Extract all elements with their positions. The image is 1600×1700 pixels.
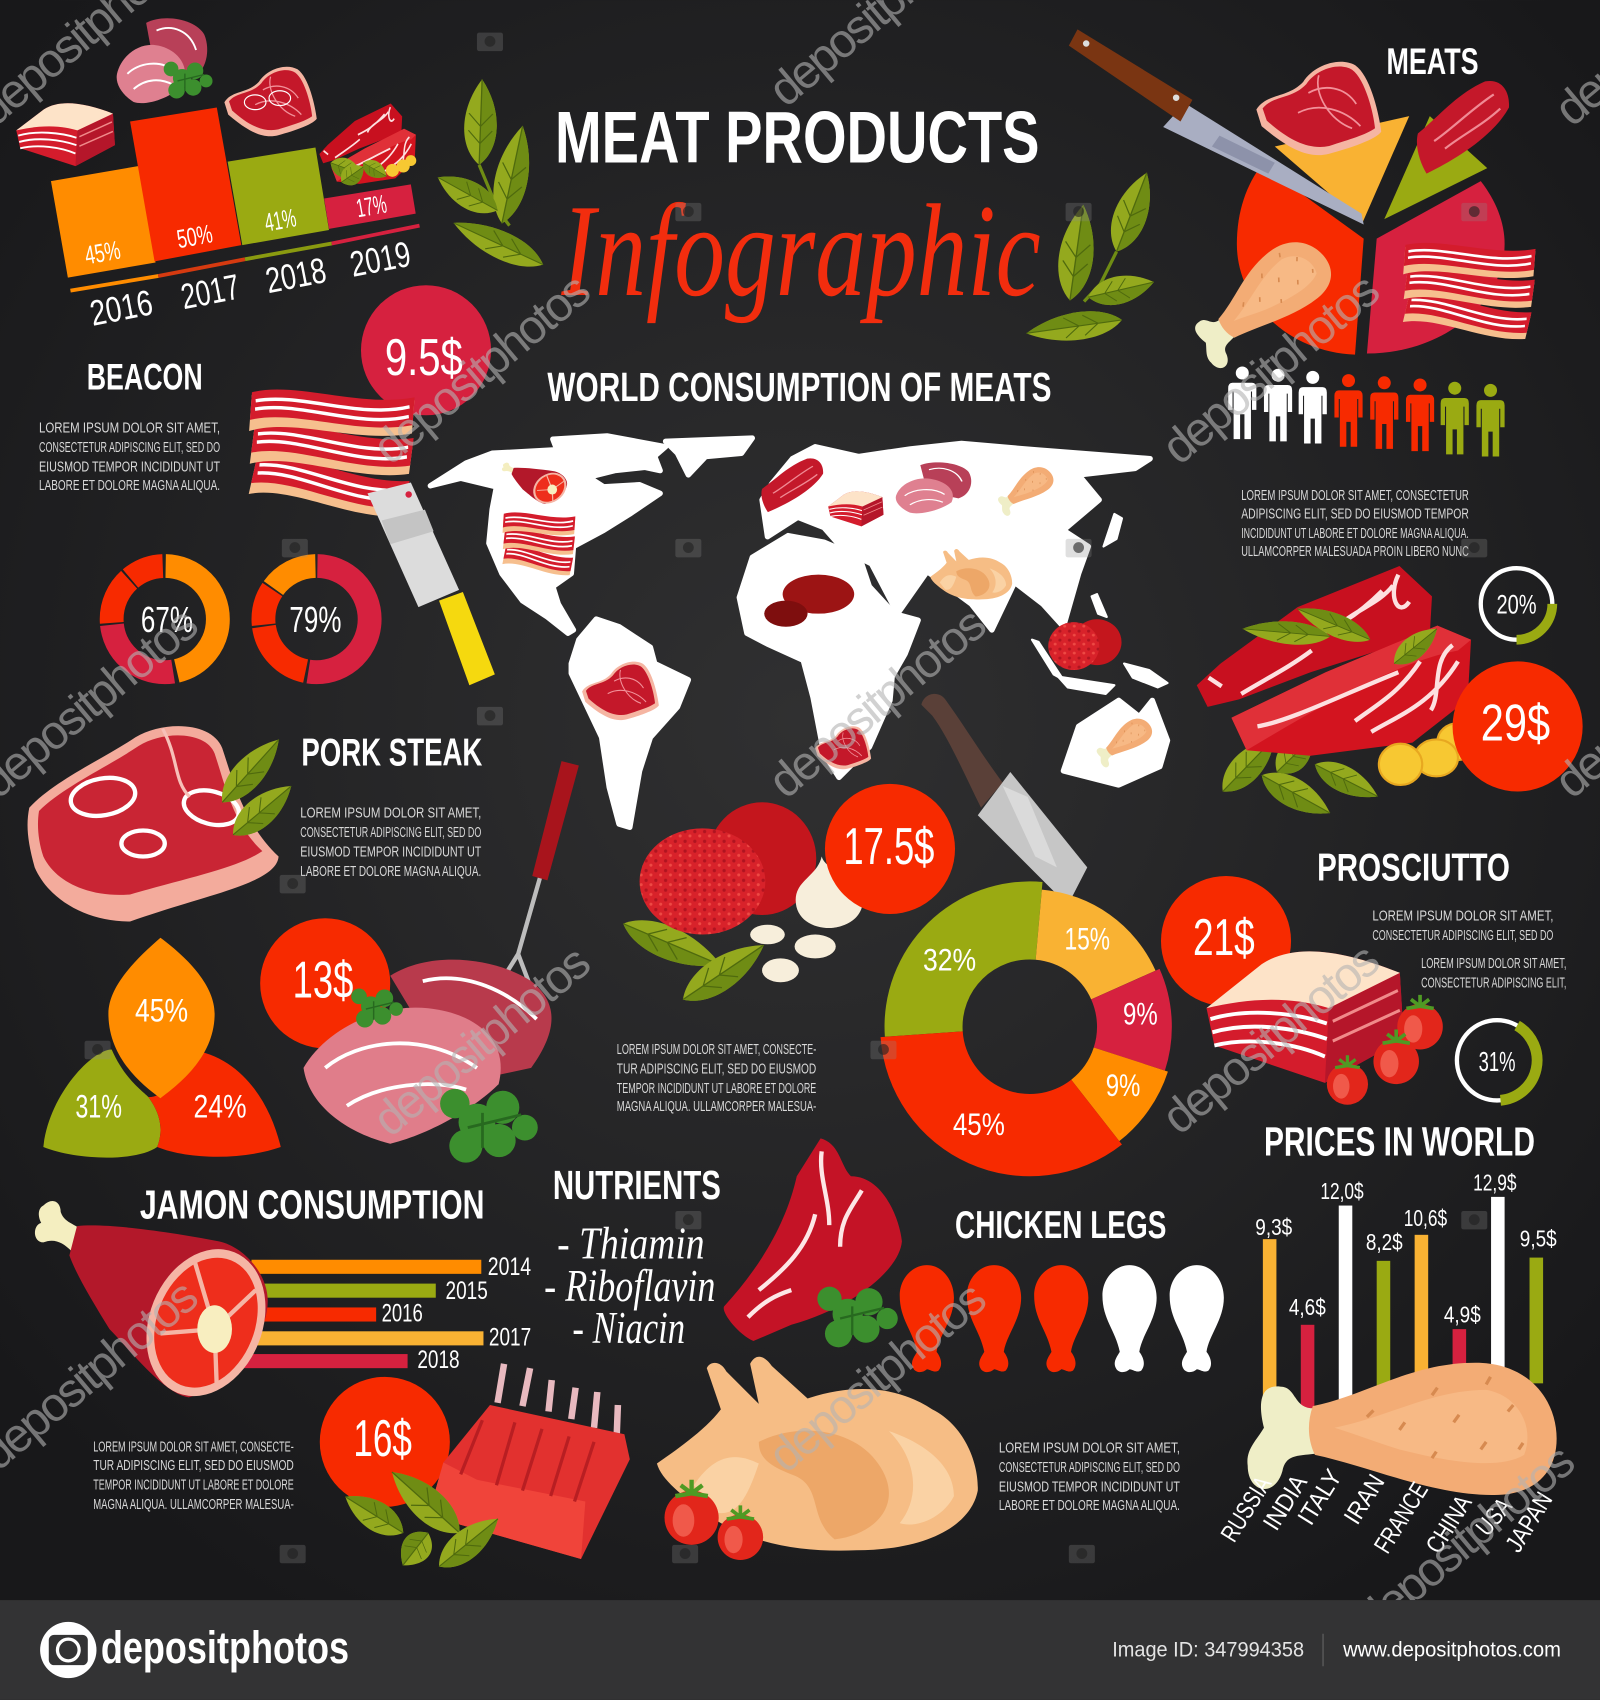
text: jamon: MAGNA ALIQUA. ULLAMCORPER MALESUA- (93, 1496, 294, 1513)
country labels: USA (1471, 1492, 1518, 1541)
price badge 17.5$: 17.5$ (843, 818, 934, 876)
chart: main donut: 45% (953, 1107, 1005, 1142)
price badge 9.5$: 9.5$ (385, 329, 463, 387)
title (555, 96, 1041, 324)
map: pork (896, 462, 971, 513)
icon: steak (1256, 62, 1381, 155)
world map (430, 436, 1167, 827)
icon: bacon strips (249, 387, 415, 524)
site url: www.depositphotos.com (1342, 1637, 1561, 1662)
bar 2016: 2016 (87, 283, 156, 334)
text: chicken legs (999, 1440, 1180, 1514)
text: pork steak: LOREM IPSUM DOLOR SIT AMET, (300, 804, 481, 821)
chart: main donut: 32% (923, 942, 976, 977)
icon: steak nutrients (724, 1138, 902, 1341)
country labels (1216, 1464, 1558, 1558)
leaves on beef (1242, 598, 1444, 672)
ring 20% (1481, 568, 1552, 640)
text: beacon: EIUSMOD TEMPOR INCIDIDUNT UT (39, 459, 220, 476)
price badge 21$ (1161, 876, 1291, 1006)
donut 67% (112, 566, 218, 672)
text: beacon: LABORE ET DOLORE MAGNA ALIQUA. (39, 477, 220, 494)
price badge 17.5$ (825, 784, 955, 914)
icon: cleaver yellow (367, 483, 495, 685)
text: chicken legs: CONSECTETUR ADIPISCING ELIT, SED DO (999, 1459, 1180, 1476)
icon: drumstick (1179, 227, 1342, 374)
chart: jamon bars (244, 1253, 531, 1374)
watermarks: depositphotos (759, 1272, 996, 1483)
chart: jamon bars: 2016 (382, 1300, 423, 1328)
price badge 16$: 16$ (353, 1410, 412, 1468)
heading: meats: MEATS (1386, 41, 1479, 82)
text: center: TUR ADIPISCING ELIT, SED DO EIUSMOD (617, 1060, 816, 1077)
list: nutrients: - Riboflavin (544, 1260, 715, 1311)
text: chicken legs: EIUSMOD TEMPOR INCIDIDUNT UT (999, 1479, 1180, 1496)
icon: steak with onion (224, 67, 317, 136)
text: center (617, 1041, 816, 1115)
icon: ham (35, 1201, 287, 1414)
chicken leg silhouettes (900, 1265, 1224, 1372)
watermark camera icons (85, 33, 1487, 1563)
heading: nutrients: NUTRIENTS (553, 1162, 721, 1208)
chart: jamon bars: 2015 (446, 1277, 488, 1305)
text: center: MAGNA ALIQUA. ULLAMCORPER MALESUA- (617, 1098, 816, 1115)
logo (40, 1622, 349, 1678)
icon: rack of lamb (428, 1364, 630, 1559)
country labels: ITALY (1292, 1464, 1348, 1530)
leaves under patties (617, 909, 773, 1013)
map: south america steak (582, 662, 659, 720)
price badge 29$ (1453, 661, 1583, 791)
icon: prosciutto slab (1207, 951, 1404, 1083)
icon: lean steak (1417, 81, 1509, 174)
price badge 16$ (320, 1377, 450, 1507)
chart: prices bars: 9,5$ (1520, 1226, 1557, 1252)
map: chicken (930, 549, 1012, 599)
map: drumstick russia (992, 461, 1058, 518)
chart: prices bars: 9,3$ (1255, 1214, 1292, 1240)
text: chicken legs: LOREM IPSUM DOLOR SIT AMET, (999, 1440, 1180, 1457)
map: south africa steak (815, 726, 871, 769)
lower leaves under beef (1212, 727, 1384, 826)
icon: parsley (351, 989, 403, 1028)
map: patties (1048, 619, 1122, 670)
icon: cleaver dark (921, 694, 1087, 905)
icon: patties (640, 802, 816, 935)
bar 2016: 45% (82, 235, 123, 270)
bar 2016 (51, 166, 158, 334)
ring 31% (1457, 1020, 1537, 1100)
text: center: LOREM IPSUM DOLOR SIT AMET, CONSECTE- (617, 1041, 816, 1058)
people row (1228, 367, 1505, 457)
country labels: JAPAN (1500, 1487, 1558, 1557)
map: australia drumstick (1090, 713, 1156, 770)
price badge 13$: 13$ (293, 951, 353, 1009)
watermarks: depositphotos (1152, 933, 1390, 1145)
country labels: IRAN (1339, 1469, 1390, 1529)
heading: jamon consumption: JAMON CONSUMPTION (140, 1182, 485, 1228)
watermarks: depositphotos (1152, 263, 1390, 475)
donut 67%: 67% (141, 600, 193, 640)
text: pork steak: EIUSMOD TEMPOR INCIDIDUNT UT (300, 844, 481, 861)
country labels: INDIA (1258, 1470, 1313, 1535)
chart: prices bars: 12,0$ (1320, 1178, 1364, 1204)
list: nutrients: - Thiamin (557, 1218, 705, 1269)
icon: garlic (750, 857, 863, 982)
heading: world consumption: WORLD CONSUMPTION OF MEATS (547, 364, 1051, 410)
text: meats: LOREM IPSUM DOLOR SIT AMET, CONSECTETUR (1241, 487, 1469, 504)
icon: pork steak top (117, 18, 207, 103)
country labels: CHINA (1421, 1490, 1478, 1558)
list: nutrients: - Niacin (572, 1302, 685, 1353)
heading: pork steak: PORK STEAK (301, 731, 482, 774)
watermarks: depositphotos (759, 597, 996, 809)
icon: chicken (657, 1357, 978, 1551)
panel: meats pie (1069, 29, 1536, 374)
chart: main donut (881, 881, 1172, 1176)
chart: prices bars: 12,9$ (1473, 1169, 1517, 1195)
chart: jamon bars: 2017 (489, 1323, 531, 1351)
icon: parsley large (440, 1089, 538, 1163)
map: africa meat (764, 575, 854, 627)
bar 2018: 2018 (262, 250, 329, 301)
bar 2019: 2019 (347, 234, 414, 285)
text: beacon (39, 420, 220, 494)
text: jamon (93, 1439, 294, 1513)
text: prosciutto (1372, 907, 1566, 992)
text: beacon: LOREM IPSUM DOLOR SIT AMET, (39, 420, 220, 437)
text: jamon: TEMPOR INCIDIDUNT UT LABORE ET DOLORE (93, 1477, 294, 1494)
icon: beef with leaves (319, 103, 416, 190)
text: chicken legs: LABORE ET DOLORE MAGNA ALIQUA. (999, 1497, 1180, 1514)
chart: leaf venn: 31% (75, 1089, 122, 1125)
bar 2019 (324, 184, 420, 285)
text: meats (1241, 487, 1469, 560)
chart: prices bars: 10,6$ (1404, 1205, 1447, 1231)
country labels: FRANCE (1369, 1477, 1434, 1558)
chart: leaf venn (43, 938, 281, 1158)
country labels: RUSSIA (1216, 1471, 1277, 1547)
heading: prosciutto: PROSCIUTTO (1317, 846, 1510, 889)
watermarks: depositphotos (1348, 1434, 1585, 1645)
donut 79% (263, 566, 370, 672)
text: center: TEMPOR INCIDIDUNT UT LABORE ET DOLORE (617, 1080, 816, 1097)
text: pork steak: CONSECTETUR ADIPISCING ELIT, SED DO (300, 824, 481, 841)
map: bacon slab (828, 491, 883, 526)
pie chart (1237, 116, 1505, 355)
icon: bacon block (16, 103, 115, 166)
bar 2018 (228, 148, 332, 301)
bar 2017: 2017 (178, 267, 243, 317)
chart: jamon bars: 2014 (488, 1253, 531, 1281)
icon: yellow slices (1379, 723, 1479, 785)
watermarks: depositphotos (363, 263, 601, 475)
list: nutrients (544, 1218, 715, 1353)
chart: main donut: 9% (1123, 997, 1158, 1032)
leaves pork steak (211, 730, 301, 846)
icon: laurel sprig right (1024, 167, 1162, 347)
icon: bacon (1403, 241, 1536, 345)
text: jamon: LOREM IPSUM DOLOR SIT AMET, CONSECTE- (93, 1439, 294, 1456)
bar 2018: 41% (262, 202, 298, 238)
icon: fork (496, 761, 579, 1003)
icon: tomatoes right (1327, 995, 1443, 1105)
bar 2017 (130, 107, 245, 317)
chart: main donut: 15% (1064, 922, 1110, 957)
icon: pork steaks (304, 960, 551, 1144)
icon: beef cuts (1197, 566, 1471, 756)
price badge 29$: 29$ (1481, 695, 1550, 753)
leaves rack (338, 1460, 507, 1578)
chart: prices bars: 4,9$ (1444, 1302, 1481, 1328)
ring 31%: 31% (1479, 1045, 1515, 1077)
donut 79%: 79% (289, 600, 341, 640)
ring 20%: 20% (1496, 589, 1537, 620)
logo: depositphotos (101, 1622, 349, 1673)
icon: laurel sprig left (431, 79, 549, 277)
icon: large drumstick (1247, 1363, 1557, 1495)
map: ham (502, 463, 572, 507)
title: Infographic (561, 177, 1041, 324)
watermarks: depositphotos (363, 935, 601, 1147)
heading: beacon: BEACON (87, 356, 203, 397)
bar 2019: 17% (354, 188, 389, 223)
chart: prices bars: 8,2$ (1366, 1229, 1403, 1255)
text: pork steak (300, 804, 481, 880)
text: meats: ADIPISCING ELIT, SED DO EIUSMOD TEMPOR (1241, 505, 1469, 522)
price badge 9.5$ (361, 285, 491, 415)
chart: prices bars (1255, 1169, 1557, 1417)
icon: chef knife (1069, 29, 1364, 225)
text: pork steak: LABORE ET DOLORE MAGNA ALIQUA. (300, 863, 481, 880)
map: europe steak (761, 458, 823, 512)
map: bacon (502, 511, 575, 579)
price badge 21$: 21$ (1193, 909, 1255, 967)
chart: prices bars: 4,6$ (1289, 1294, 1326, 1320)
chart: jamon bars: 2018 (417, 1346, 460, 1374)
icon: tomatoes (664, 1480, 763, 1560)
icon: pork steak with onion (28, 726, 279, 922)
price badge 13$ (260, 918, 390, 1048)
chart: main donut: 9% (1106, 1068, 1140, 1103)
panel: year bar chart (51, 107, 420, 334)
footer bar (0, 1600, 1600, 1700)
chart: leaf venn: 45% (135, 992, 188, 1028)
bar 2017: 50% (174, 218, 215, 254)
title: MEAT PRODUCTS (555, 96, 1040, 179)
heading: chicken legs: CHICKEN LEGS (955, 1204, 1166, 1247)
text: beacon: CONSECTETUR ADIPISCING ELIT, SED DO (39, 439, 220, 456)
icon: parsley top (164, 62, 213, 98)
image id: Image ID: 347994358 (1112, 1637, 1304, 1662)
chart: leaf venn: 24% (193, 1089, 247, 1125)
text: jamon: TUR ADIPISCING ELIT, SED DO EIUSMOD (93, 1457, 294, 1474)
icon: parsley nutrients (817, 1287, 898, 1347)
